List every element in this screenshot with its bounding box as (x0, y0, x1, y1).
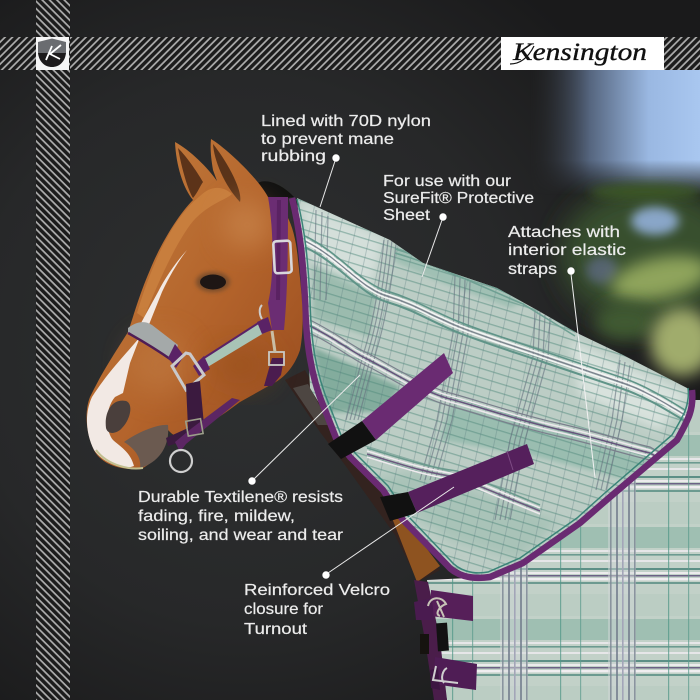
halter buckle (273, 241, 292, 273)
callout: durable Textilene: soiling, and wear and tear (138, 527, 344, 544)
rug hem binding (292, 198, 692, 578)
callout: elastic straps (508, 224, 626, 478)
nose and muzzle (106, 401, 130, 433)
cheek ring (172, 353, 204, 390)
callout: Velcro closure: Reinforced Velcro (244, 582, 390, 599)
icon: K shield logo (36, 37, 69, 70)
callout: Velcro closure: closure for (244, 601, 324, 618)
callout: durable Textilene: fading, fire, mildew, (138, 508, 295, 525)
body rug (414, 400, 700, 700)
horse head (87, 139, 303, 469)
callout: mane lining: rubbing (261, 148, 326, 165)
body straps and clips (414, 590, 477, 690)
blurred foliage and sky backdrop (530, 70, 700, 376)
callout: elastic straps: Attaches with (508, 224, 620, 241)
callout: elastic straps: straps (508, 261, 557, 278)
vertical stripe band (36, 0, 70, 700)
callout: mane lining: to prevent mane (261, 131, 394, 148)
header stripe band (0, 37, 700, 70)
callout: elastic straps: interior elastic (508, 242, 626, 259)
halter (128, 197, 292, 472)
neck cover rug (290, 190, 700, 590)
callout: durable Textilene (138, 375, 360, 544)
throat strap (264, 358, 284, 386)
Kensington logo (501, 37, 664, 70)
lower velcro strap (380, 444, 534, 521)
callout: Velcro closure: Turnout (244, 621, 308, 638)
callout: mane lining: Lined with 70D nylon (261, 113, 431, 130)
horse chest and body shadow (285, 370, 440, 582)
callout: Velcro closure (244, 487, 454, 638)
callout: durable Textilene: Durable Textilene® resists (138, 489, 343, 506)
upper velcro strap (328, 353, 453, 459)
callout: SureFit compatibility: For use with our (383, 173, 512, 190)
callout: SureFit compatibility: SureFit® Protective (383, 190, 534, 207)
white blaze (87, 250, 187, 467)
callout: SureFit compatibility: Sheet (383, 207, 431, 224)
callout: mane lining (261, 113, 431, 207)
callout: SureFit compatibility (383, 173, 534, 277)
eye (196, 272, 230, 292)
cheek strap plaid (204, 322, 264, 368)
chin strap (166, 381, 204, 446)
Kensington logo: Kensington (512, 39, 647, 66)
noseband plaid (128, 322, 178, 360)
